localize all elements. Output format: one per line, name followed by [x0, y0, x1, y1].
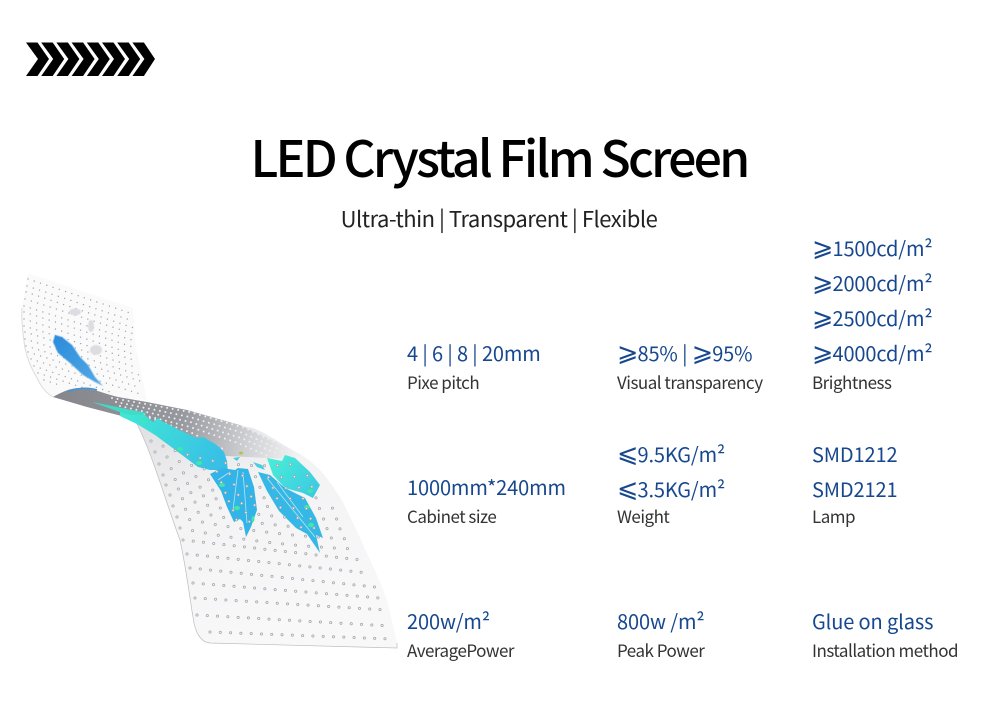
spec: visual transparency — [617, 332, 763, 394]
spec: average power: 200w/m² — [407, 606, 490, 635]
lamp dots on lower sheet — [151, 441, 392, 639]
spec: average power — [407, 606, 515, 662]
spec: brightness: ⩾2500cd/m² — [812, 297, 932, 334]
spec: average power: AveragePower — [407, 637, 515, 662]
spec: lamp: SMD2121 — [812, 474, 897, 503]
lower film sheet — [132, 415, 397, 648]
upper film sheet — [22, 273, 147, 400]
spec: installation method — [812, 606, 958, 662]
spec: weight: Weight — [617, 503, 670, 528]
spec: visual transparency: ⩾85% | ⩾95% — [617, 332, 752, 369]
blue leaf on upper sheet — [53, 335, 103, 386]
dark folded band — [53, 388, 303, 460]
spec: cabinet size: Cabinet size — [407, 503, 496, 528]
spec: weight: ⩽9.5KG/m² — [617, 433, 725, 470]
spec: lamp: Lamp — [812, 503, 855, 528]
spec: brightness: ⩾1500cd/m² — [812, 227, 932, 264]
spec: pixel pitch: 4 | 6 | 8 | 20mm — [407, 338, 541, 367]
spec: weight: ⩽3.5KG/m² — [617, 468, 725, 505]
spec: cabinet size: 1000mm*240mm — [407, 472, 566, 501]
cyan leaves — [92, 402, 323, 553]
title: LED Crystal Film Screen — [250, 120, 748, 192]
spec: brightness: ⩾4000cd/m² — [812, 332, 932, 369]
spec: peak power — [617, 606, 705, 662]
faint leaf marks — [69, 308, 102, 355]
logo: chevron arrows — [26, 42, 155, 76]
spec: lamp: SMD1212 — [812, 439, 898, 468]
subtitle: Ultra-thin | Transparent | Flexible — [341, 202, 658, 234]
spec: visual transparency: Visual transparency — [617, 369, 763, 394]
spec: cabinet size — [407, 472, 566, 528]
spec: peak power: 800w /m² — [617, 606, 704, 635]
spec: weight — [617, 433, 725, 528]
spec: installation method: Installation method — [812, 637, 958, 662]
illustration: flexible LED film — [22, 273, 397, 648]
spec: pixel pitch — [407, 338, 541, 394]
spec: brightness — [812, 227, 932, 394]
spec: installation method: Glue on glass — [812, 606, 933, 635]
spec: pixel pitch: Pixe pitch — [407, 369, 479, 394]
spec: brightness: ⩾2000cd/m² — [812, 262, 932, 299]
spec: lamp — [812, 439, 898, 528]
spec: brightness: Brightness — [812, 369, 892, 394]
spec: peak power: Peak Power — [617, 637, 705, 662]
